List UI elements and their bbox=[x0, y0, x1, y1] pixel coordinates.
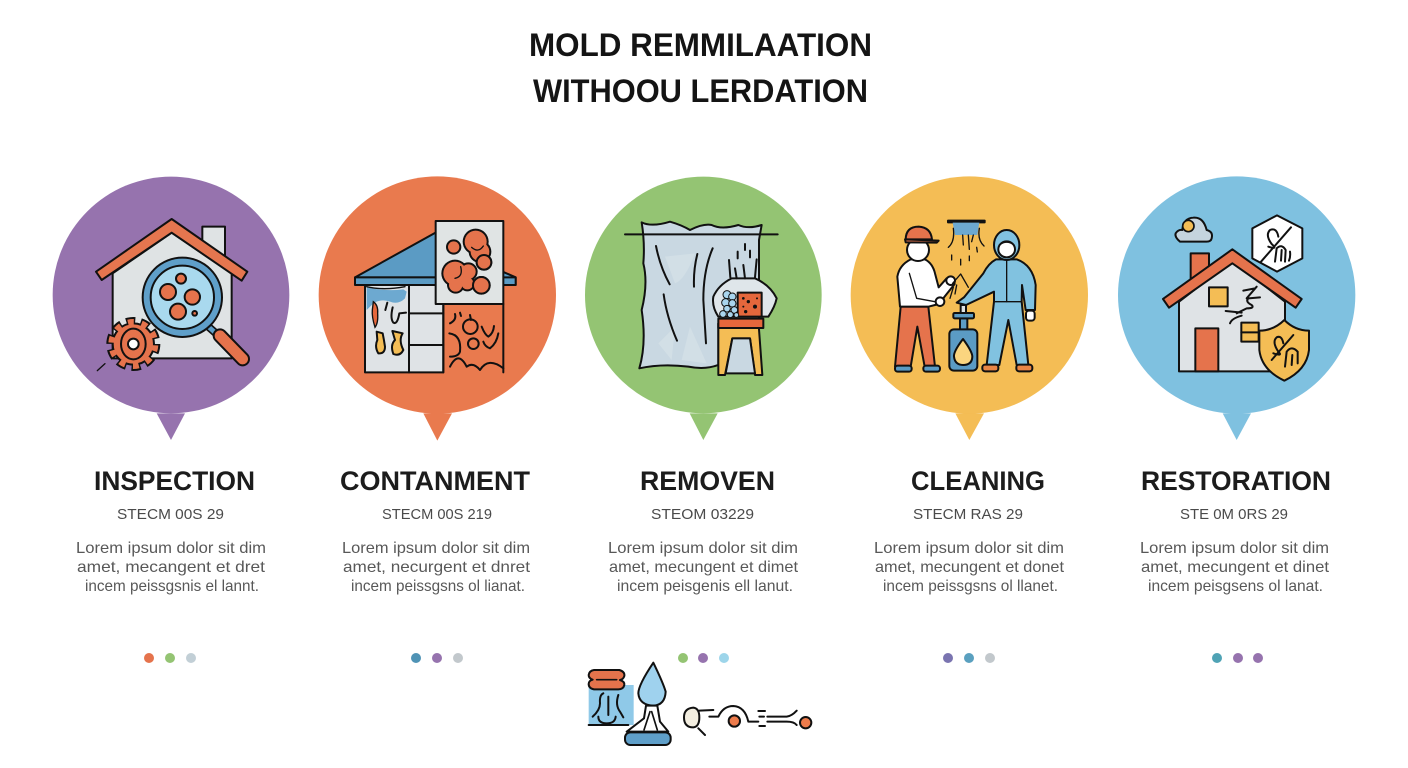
panel: removal bbox=[585, 177, 822, 663]
text block: cleaning: amet, mecungent et donet bbox=[875, 559, 1065, 576]
icon: contained wall with mold bbox=[355, 221, 516, 372]
text block: removal: incem peisgenis ell lanut. bbox=[617, 578, 793, 595]
subtitle: containment: STECM 00S 219 bbox=[382, 506, 492, 523]
panel: cleaning bbox=[851, 176, 1088, 663]
dots: cleaning bbox=[943, 653, 995, 663]
text block: removal bbox=[608, 540, 799, 595]
text block: cleaning: incem peissgsns ol llanet. bbox=[883, 578, 1058, 595]
text block: removal: amet, mecungent et dimet bbox=[609, 559, 799, 576]
text block: containment bbox=[342, 540, 531, 595]
text block: restoration bbox=[1140, 540, 1330, 595]
speech bubble: restoration bbox=[1118, 176, 1355, 440]
icon: plastic sheet and mold removal bbox=[625, 222, 778, 375]
heading: containment: CONTANMENT bbox=[340, 466, 530, 496]
panel: restoration bbox=[1118, 176, 1355, 663]
icon: house with magnifier and gear bbox=[96, 219, 247, 371]
text block: containment: amet, necurgent et dnret bbox=[343, 559, 531, 576]
dots: removal bbox=[678, 653, 729, 663]
title: MOLD REMMILAATION bbox=[529, 27, 872, 63]
panel: inspection bbox=[53, 177, 289, 663]
text block: containment: incem peissgsns ol lianat. bbox=[351, 578, 525, 595]
dots: inspection bbox=[144, 653, 196, 663]
text block: restoration: Lorem ipsum dolor sit dim bbox=[1140, 540, 1329, 557]
title bbox=[529, 27, 872, 109]
heading: removal: REMOVEN bbox=[640, 466, 775, 496]
icon: two workers cleaning with sprayer bbox=[895, 221, 1036, 372]
heading: inspection: INSPECTION bbox=[94, 466, 255, 496]
text block: restoration: incem peisgsens ol lanat. bbox=[1148, 578, 1323, 595]
text block: containment: Lorem ipsum dolor sit dim bbox=[342, 540, 530, 557]
subtitle: inspection: STECM 00S 29 bbox=[117, 506, 224, 523]
speech bubble: removal bbox=[585, 177, 822, 440]
dots: containment bbox=[411, 653, 463, 663]
dots: restoration bbox=[1212, 653, 1263, 663]
speech bubble: cleaning bbox=[851, 176, 1088, 440]
text block: inspection: amet, mecangent et dret bbox=[77, 559, 266, 576]
heading: cleaning: CLEANING bbox=[911, 466, 1045, 496]
subtitle: removal: STEOM 03229 bbox=[651, 506, 754, 523]
text block: restoration: amet, mecungent et dinet bbox=[1141, 559, 1330, 576]
speech bubble: containment bbox=[319, 176, 556, 441]
text block: removal: Lorem ipsum dolor sit dim bbox=[608, 540, 798, 557]
text block: inspection bbox=[76, 540, 266, 595]
speech bubble: inspection bbox=[53, 177, 289, 440]
subtitle: restoration: STE 0M 0RS 29 bbox=[1180, 506, 1288, 523]
subtitle: cleaning: STECM RAS 29 bbox=[913, 506, 1023, 523]
title: WITHOOU LERDATION bbox=[533, 73, 868, 109]
text block: cleaning: Lorem ipsum dolor sit dim bbox=[874, 540, 1064, 557]
icon: bottom cluster of tools and droplet bbox=[589, 663, 811, 745]
text block: inspection: incem peissgsnis el lannt. bbox=[85, 578, 259, 595]
icon: restored house with shield bbox=[1163, 215, 1309, 381]
heading: restoration: RESTORATION bbox=[1141, 466, 1331, 496]
panel: containment bbox=[319, 176, 556, 663]
text block: cleaning bbox=[874, 540, 1065, 595]
text block: inspection: Lorem ipsum dolor sit dim bbox=[76, 540, 266, 557]
